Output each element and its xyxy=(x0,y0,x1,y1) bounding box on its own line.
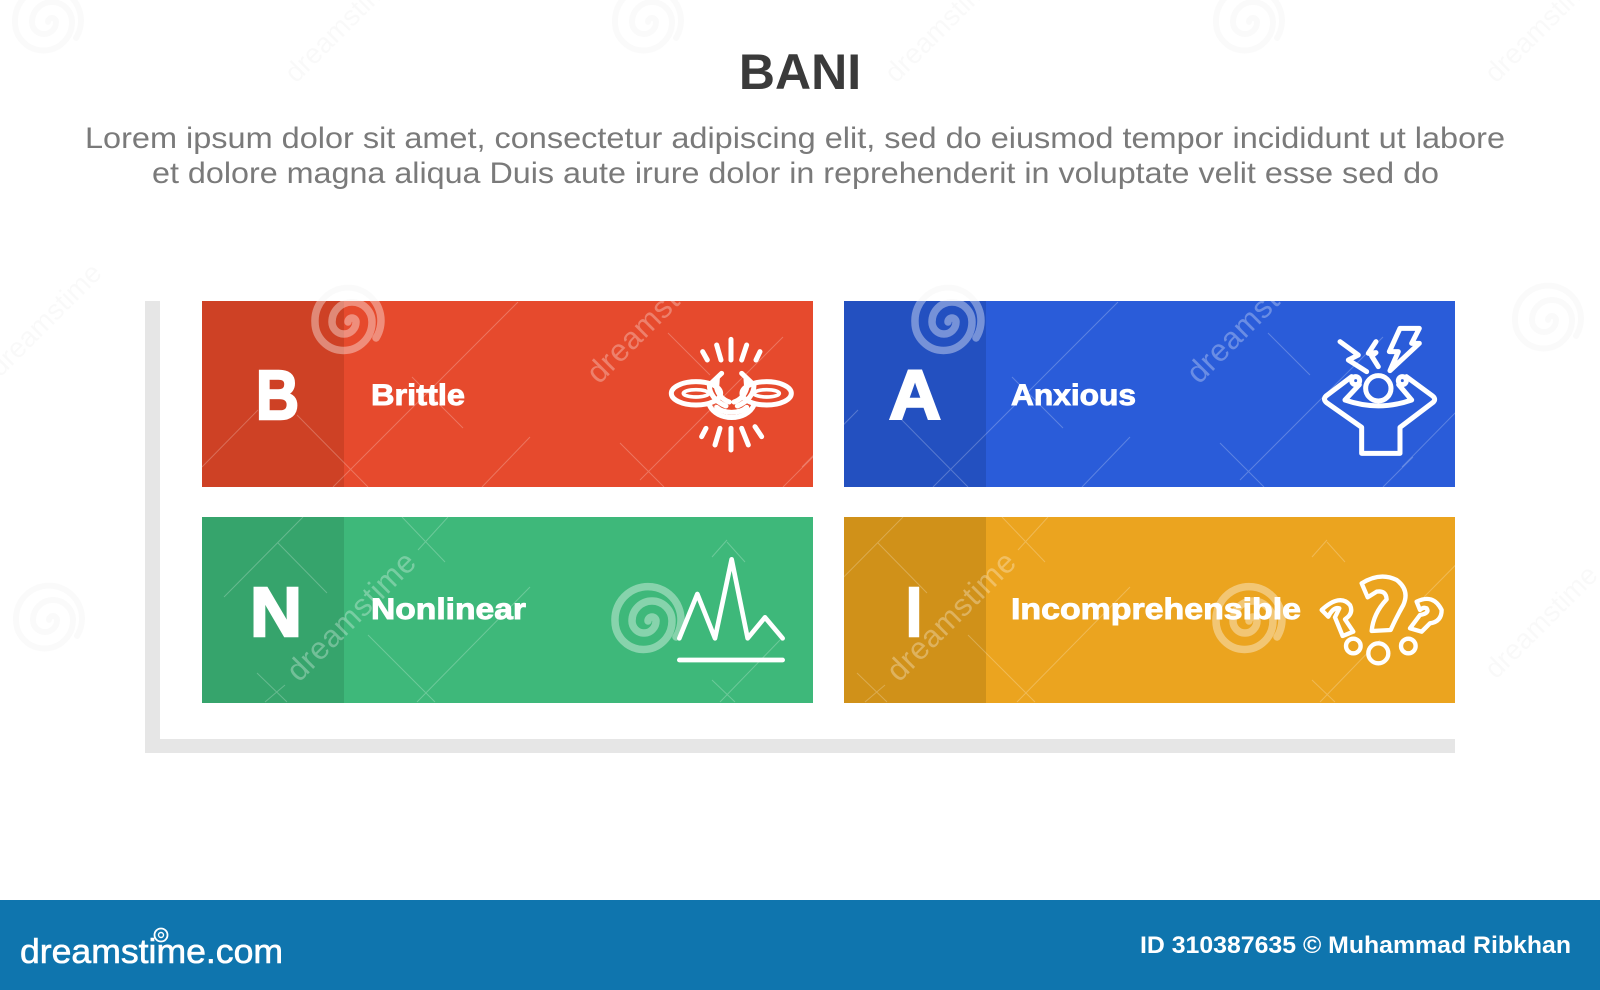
watermark overlay on cards xyxy=(202,301,1455,702)
letter I: I xyxy=(906,573,922,651)
faint background watermarks xyxy=(0,0,1600,684)
panel: Anxious xyxy=(844,301,1455,487)
label Incomprehensible: Incomprehensible xyxy=(1011,593,1301,626)
label Nonlinear: Nonlinear xyxy=(371,593,526,626)
label Brittle: Brittle xyxy=(371,379,465,412)
watermark overlay on cards: dreamstime xyxy=(579,246,723,390)
footer credit: ID 310387635 © Muhammad Ribkhan xyxy=(1140,932,1571,959)
footer bar xyxy=(0,900,1600,990)
subtitle text: Lorem ipsum dolor sit amet, consectetur adipiscing elit, sed do eiusmod tempor incididunt ut labore xyxy=(85,122,1505,155)
watermark overlay on cards: dreamstime xyxy=(279,544,423,688)
faint background watermarks: dreamstime xyxy=(1478,559,1600,684)
watermark overlay on cards: dreamstime xyxy=(1179,246,1323,390)
panel: Incomprehensible xyxy=(844,517,1455,703)
title: BANI xyxy=(739,44,861,100)
panel: Brittle xyxy=(202,301,813,487)
panel: Nonlinear xyxy=(202,517,813,703)
subtitle text xyxy=(85,122,1505,190)
footer logo: dreamstime.com xyxy=(20,933,283,971)
icon: question marks xyxy=(1322,577,1442,663)
label Anxious: Anxious xyxy=(1011,379,1136,412)
icon: broken chain xyxy=(671,339,791,450)
letter A: A xyxy=(889,356,941,434)
L-shaped axis frame xyxy=(145,301,1455,753)
letter N: N xyxy=(250,573,302,651)
icon: anxious person xyxy=(1324,328,1435,453)
icon: nonlinear graph xyxy=(679,559,783,660)
letter B: B xyxy=(256,356,299,434)
subtitle text: et dolore magna aliqua Duis aute irure dolor in reprehenderit in voluptate velit esse sed do xyxy=(152,157,1439,190)
watermark overlay on cards: dreamstime xyxy=(879,544,1023,688)
